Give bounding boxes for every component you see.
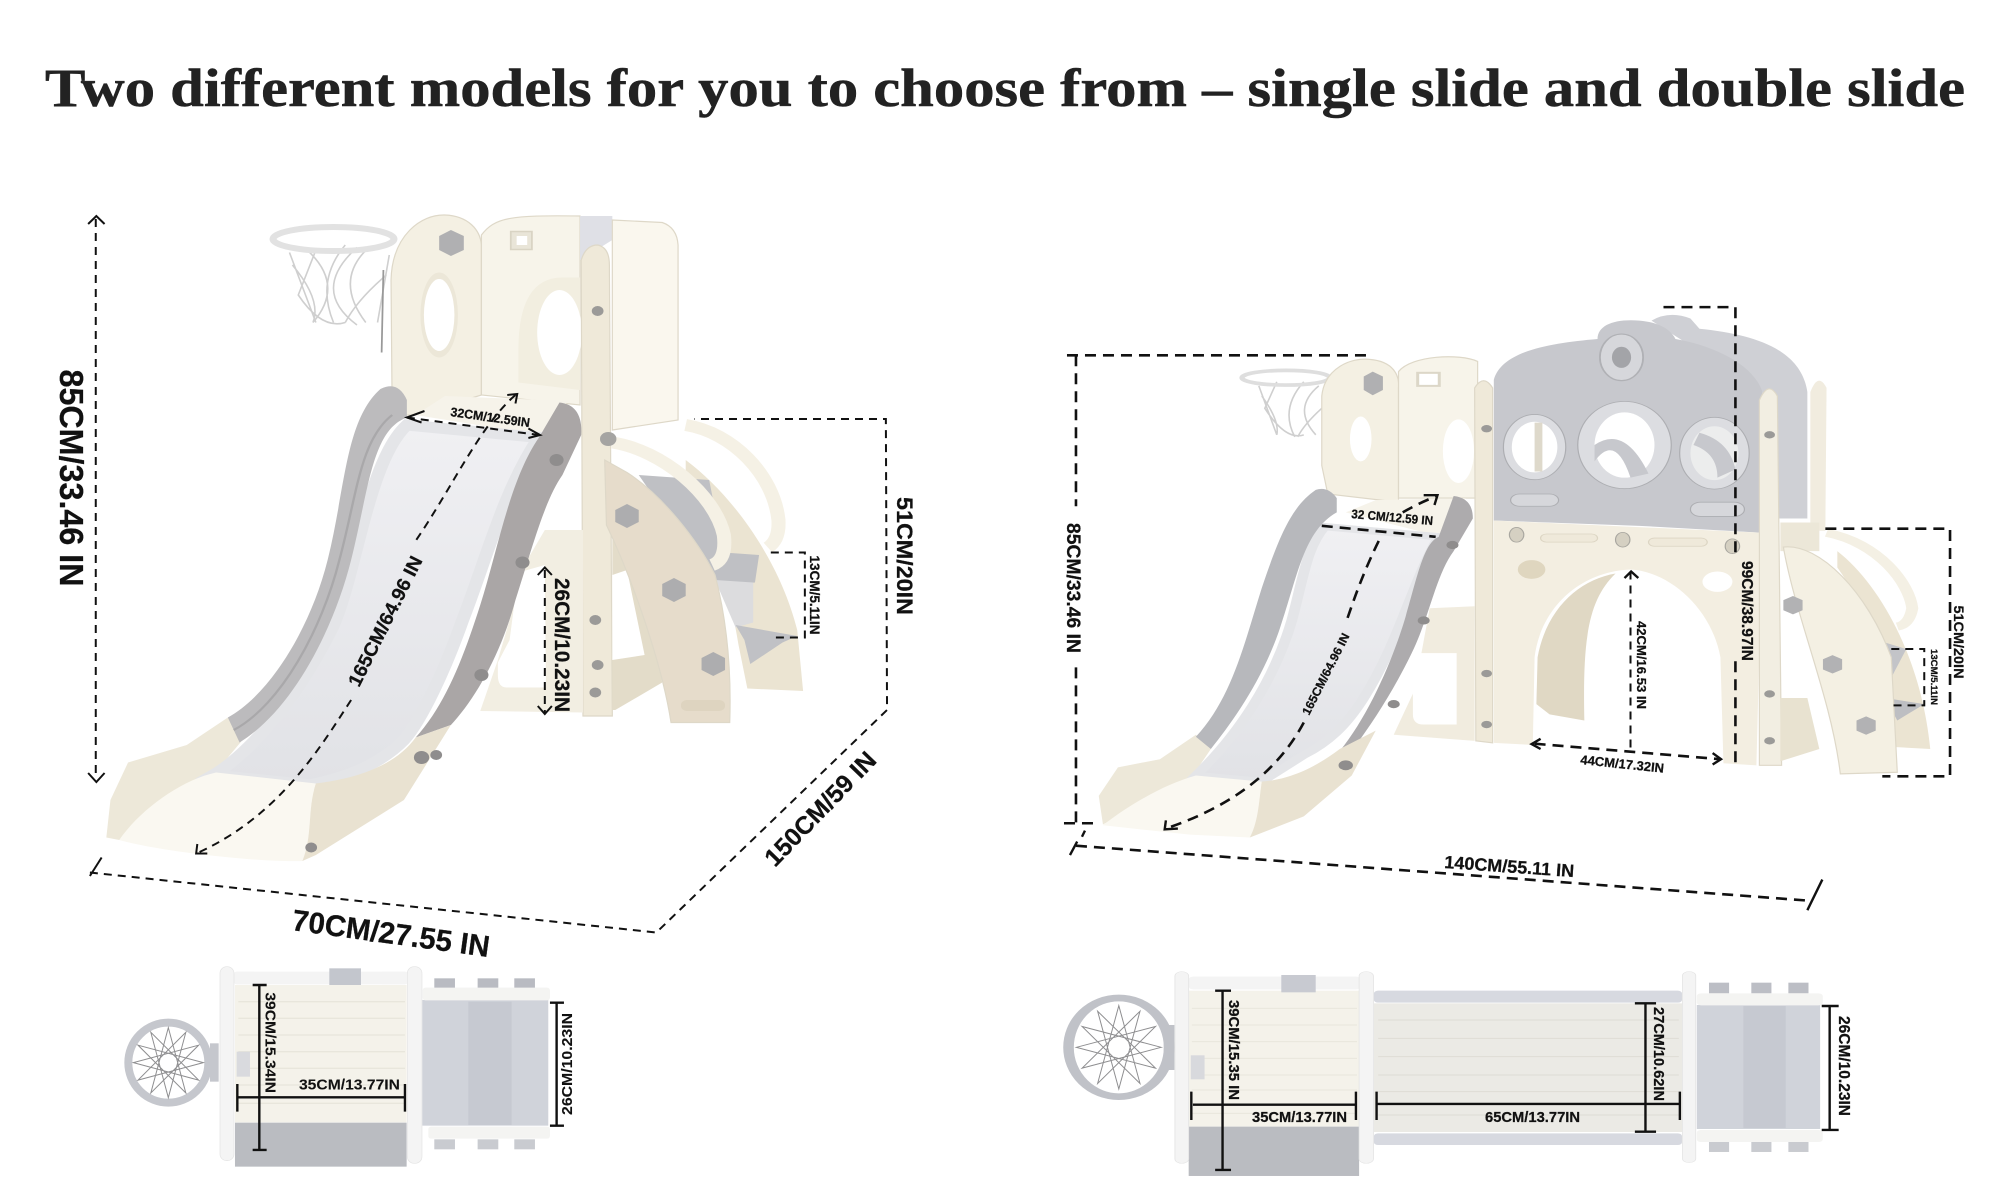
dimension labels: single slide: 70CM/27.55 IN: [290, 904, 492, 964]
tower: [391, 215, 678, 716]
dimension labels: 26CM/10.23IN: [560, 1013, 576, 1115]
dimension labels: double slide top view: 26CM/10.23IN: [1835, 1016, 1852, 1116]
steps: [1697, 983, 1823, 1152]
dimension lines: [1191, 991, 1839, 1170]
dimension labels: single slide: 13CM/5.11IN: [807, 556, 822, 634]
top view drawing: [1069, 972, 1839, 1176]
dimension lines: [237, 985, 564, 1150]
bridge deck: [1374, 972, 1696, 1163]
icon: basketball hoop: [1242, 370, 1330, 437]
dimension labels: double slide: 99CM/38.97IN: [1738, 561, 1755, 661]
dimension labels: double slide: 140CM/55.11 IN: [1444, 852, 1575, 881]
dimension labels: double slide top view: 35CM/13.77IN: [1252, 1110, 1347, 1126]
dimension labels: double slide: 51CM/20IN: [1951, 606, 1967, 678]
tower: [1322, 357, 1478, 741]
dimension labels: double slide: 42CM/16.53 IN: [1634, 621, 1649, 709]
dimension labels: single slide: [53, 370, 917, 964]
steps: [600, 425, 803, 722]
dimension labels: double slide top view: 27CM/10.62IN: [1650, 1007, 1666, 1101]
dimension labels: double slide: [1062, 507, 1967, 881]
steps: [1783, 533, 1930, 774]
panel: single slide top view: [128, 967, 576, 1167]
product drawing: single slide: [88, 215, 887, 932]
gray rocket panel: [1494, 320, 1762, 533]
dimension labels: double slide: 32 CM/12.59 IN: [1351, 507, 1434, 528]
dimension labels: double slide: 85CM/33.46 IN: [1062, 523, 1084, 653]
dimension lines: [1064, 307, 1950, 910]
panel: double slide model: [1062, 307, 1967, 910]
icon: hoop top view: [128, 1023, 219, 1103]
slide: [106, 386, 581, 861]
dimension labels: double slide top view: 65CM/13.77IN: [1485, 1110, 1580, 1126]
dimension lines: [88, 216, 887, 932]
dimension labels: single slide: 165CM/64.96 IN: [345, 553, 428, 690]
slide: [1099, 489, 1473, 838]
dimension labels: [262, 992, 576, 1115]
title: Two different models for you to choose from – single slide and double slide: [45, 58, 1965, 118]
panel: double slide top view: [1069, 972, 1852, 1176]
dimension labels: single slide: 32CM/12.59IN: [450, 405, 531, 430]
icon: basketball hoop: [273, 227, 394, 352]
steps: [422, 978, 550, 1149]
dimension labels: 39CM/15.34IN: [262, 992, 278, 1093]
dimension labels: 35CM/13.77IN: [299, 1077, 400, 1093]
arch base: [1475, 381, 1819, 765]
dimension labels: single slide: 85CM/33.46 IN: [53, 370, 90, 586]
dimension labels: double slide: 13CM/5.11IN: [1928, 649, 1939, 705]
panel: single slide model: [53, 215, 917, 964]
back gray panel: [1651, 315, 1827, 531]
dimension labels: double slide top view: [1225, 1000, 1852, 1126]
dimension labels: single slide: 26CM/10.23IN: [550, 578, 573, 712]
dimension labels: double slide: 44CM/17.32IN: [1580, 752, 1665, 776]
deck: [220, 967, 422, 1167]
deck: [1175, 972, 1373, 1176]
product drawing: double slide: [1064, 307, 1950, 910]
dimension labels: single slide: 150CM/59 IN: [759, 746, 882, 872]
dimension labels: double slide: 165CM/64.96 IN: [1299, 631, 1353, 717]
icon: hoop top view: [1069, 998, 1174, 1097]
dimension labels: single slide: 51CM/20IN: [892, 497, 917, 615]
dimension labels: double slide top view: 39CM/15.35 IN: [1225, 1000, 1242, 1100]
